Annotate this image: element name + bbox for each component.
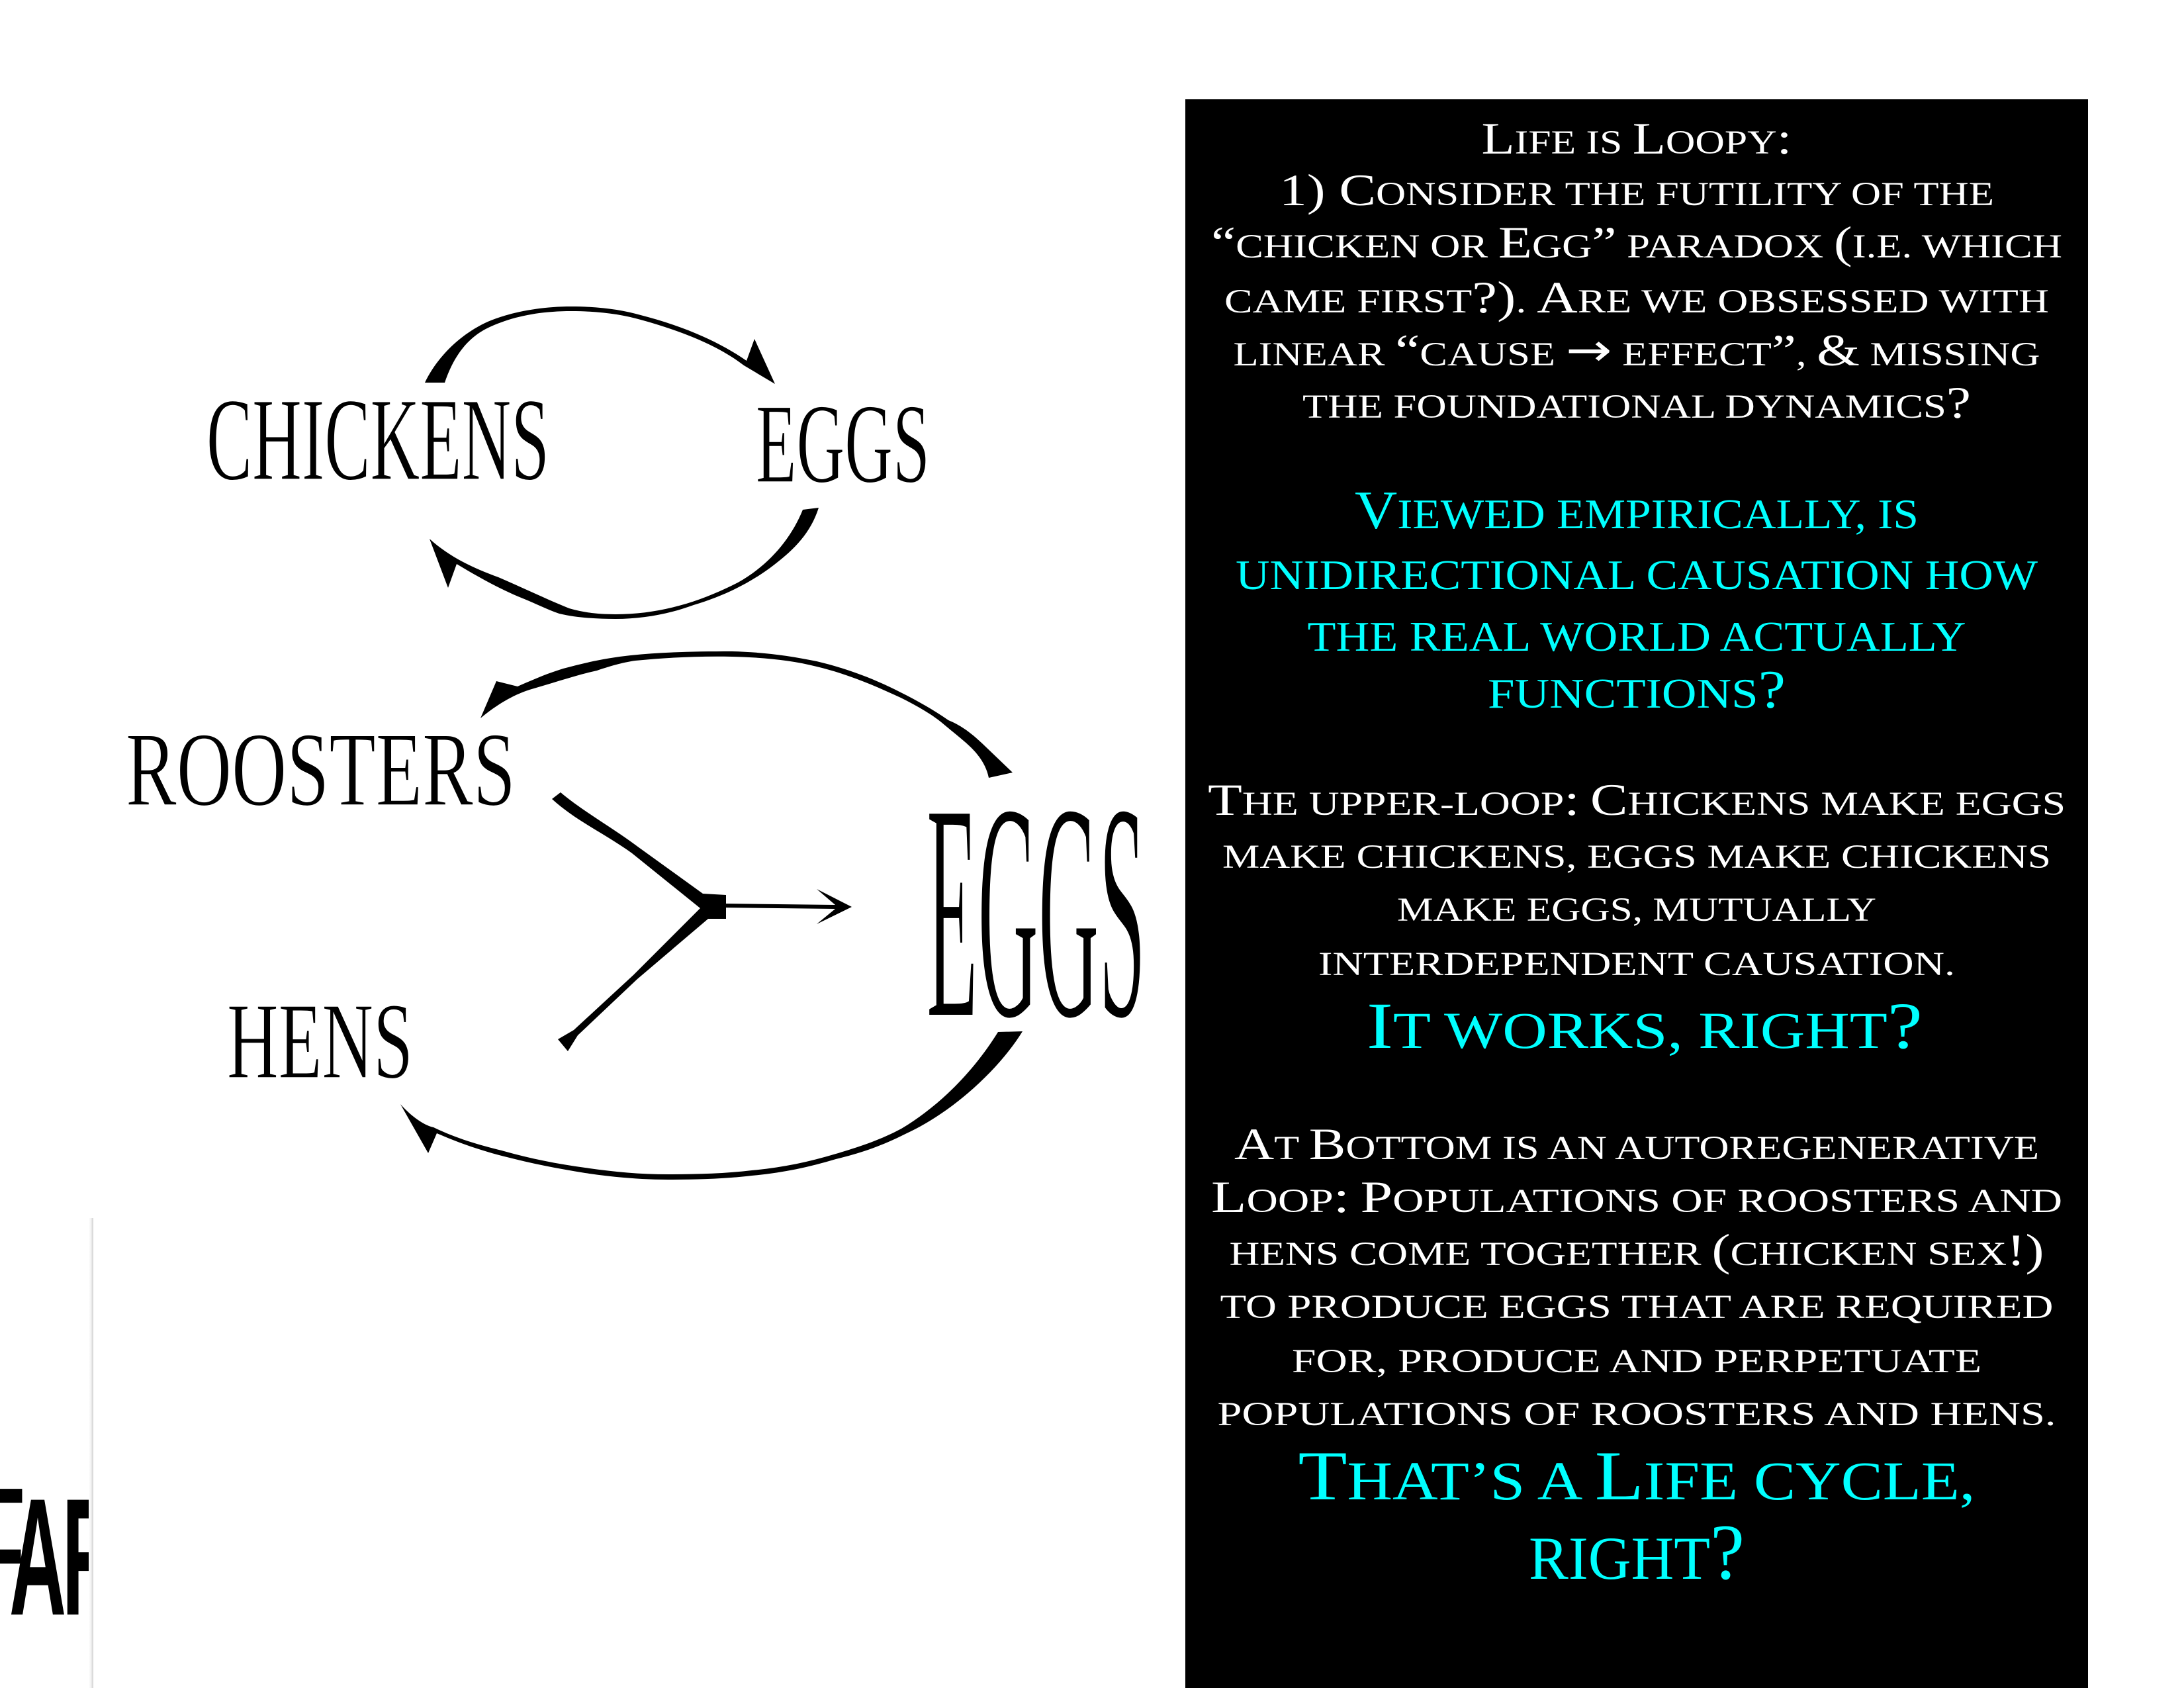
text block: the upper loop <box>1208 774 2066 983</box>
text block: chicken or egg paradox: 1) C ONSIDER THE FUTILITY OF THE <box>1279 165 1994 215</box>
clipped lettering at lower left <box>0 1489 89 1615</box>
text block: the upper loop: INTERDEPENDENT CAUSATION. <box>1318 946 1955 983</box>
text block: autoregenerative loop: FOR, PRODUCE AND PERPETUATE <box>1292 1343 1981 1380</box>
diagram: chickens and eggs loop <box>206 306 930 619</box>
label: chickens: CHICKENS <box>206 373 549 505</box>
diagram: roosters, hens and eggs loop <box>126 651 1146 1180</box>
text block: the upper loop: THE UPPER-LOOP : CHICKENS MAKE EGGS <box>1208 774 2066 825</box>
text block: autoregenerative loop: POPULATIONS OF ROOSTERS AND HENS. <box>1218 1396 2056 1433</box>
text block: chicken or egg paradox <box>1211 165 2062 428</box>
text: EGGS <box>927 739 1146 1084</box>
text block: chicken or egg paradox: LINEAR “CAUSE → EFFECT ”, & MISSING <box>1234 324 2040 377</box>
callout: it works, right?: IT WORKS, RIGHT ? <box>1367 989 1923 1062</box>
text block: the upper loop: MAKE EGGS, MUTUALLY <box>1397 892 1876 929</box>
text block: autoregenerative loop: HENS COME TOGETHER (CHICKEN SEX !) <box>1230 1225 2044 1275</box>
heading: life is loopy: LIFE IS LOOPY : <box>1481 113 1792 164</box>
text block: autoregenerative loop <box>1211 1119 2062 1433</box>
callout: unidirectional causation question: FUNCTIONS ? <box>1488 659 1786 720</box>
callout: that's a life cycle, right?: THAT’S A LIFE CYCLE, <box>1298 1437 1975 1515</box>
text block: the upper loop: MAKE CHICKENS, EGGS MAKE CHICKENS <box>1222 839 2051 876</box>
callout: unidirectional causation question <box>1236 480 2038 720</box>
arrow: eggs to roosters <box>480 651 1013 778</box>
text block: chicken or egg paradox: “CHICKEN OR EGG” PARADOX (I.E. WHICH <box>1211 217 2062 267</box>
label: roosters: ROOSTERS <box>126 710 516 828</box>
text: R <box>62 1464 118 1650</box>
clipped lettering at lower left: A <box>9 1464 66 1650</box>
text block: autoregenerative loop: TO PRODUCE EGGS THAT ARE REQUIRED <box>1220 1289 2053 1326</box>
arrow: join to eggs <box>723 889 852 924</box>
arrow: chickens to eggs <box>425 306 775 384</box>
panel: black explanation <box>1185 99 2088 1688</box>
callout: that's a life cycle, right?: RIGHT? <box>1529 1508 1745 1596</box>
callout: unidirectional causation question: VIEWED EMPIRICALLY, IS <box>1355 480 1919 540</box>
callout: unidirectional causation question: UNIDIRECTIONAL CAUSATION HOW <box>1236 551 2038 598</box>
text block: chicken or egg paradox: THE FOUNDATIONAL DYNAMICS ? <box>1302 377 1971 428</box>
arrow: eggs to chickens <box>430 508 819 619</box>
callout: unidirectional causation question: THE REAL WORLD ACTUALLY <box>1308 613 1966 660</box>
page edge shadow <box>89 1218 93 1688</box>
text block: chicken or egg paradox: CAME FIRST ?) . ARE WE OBSESSED WITH <box>1224 272 2049 322</box>
text block: autoregenerative loop: LOOP : POPULATIONS OF ROOSTERS AND <box>1211 1172 2062 1222</box>
label: hens: HENS <box>227 980 413 1102</box>
text block: autoregenerative loop: AT BOTTOM IS AN AUTOREGENERATIVE <box>1234 1119 2039 1169</box>
callout: that's a life cycle, right? <box>1298 1437 1975 1596</box>
arrow: roosters and hens join <box>552 792 726 1051</box>
label: eggs: EGGS <box>756 381 930 507</box>
arrow: eggs to hens <box>400 1031 1023 1180</box>
